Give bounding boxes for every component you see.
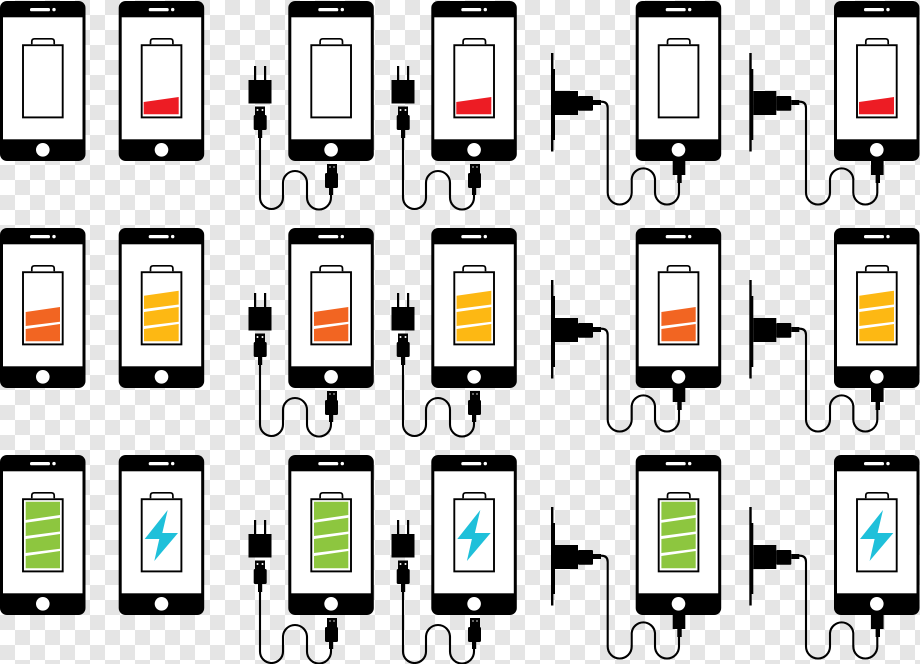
- phone: yellow three-bar battery: [119, 228, 204, 388]
- wall charger and cable: [749, 280, 884, 432]
- phone: low red battery with plug charger: [431, 1, 517, 161]
- phone: empty battery with plug charger: [288, 1, 374, 161]
- wall charger and cable: [551, 507, 685, 658]
- plug charger and cable: [248, 293, 338, 436]
- phone: low red battery: [119, 1, 204, 161]
- wall charger and cable: [749, 53, 884, 205]
- plug charger and cable: [248, 66, 338, 210]
- phone: orange battery on wall charger: [636, 228, 721, 388]
- wall charger and cable: [749, 507, 884, 658]
- phone: charging bolt on wall charger: [834, 455, 920, 615]
- phone: full green battery: [0, 455, 86, 615]
- plug charger and cable: [392, 520, 481, 664]
- phone: empty battery: [0, 1, 86, 161]
- phone: empty battery on wall charger: [636, 1, 721, 161]
- wall charger and cable: [551, 53, 685, 205]
- wall charger and cable: [551, 280, 685, 432]
- phone: charging bolt with plug charger: [431, 455, 517, 615]
- plug charger and cable: [248, 520, 338, 664]
- phone: full green battery on wall charger: [636, 455, 721, 615]
- plug charger and cable: [392, 293, 481, 436]
- plug charger and cable: [392, 66, 481, 210]
- phone: orange two-bar battery: [0, 228, 86, 388]
- phone: orange battery with plug charger: [288, 228, 374, 388]
- phone: yellow battery on wall charger: [834, 228, 920, 388]
- phone: charging bolt battery: [119, 455, 204, 615]
- phone: full green battery with plug charger: [288, 455, 374, 615]
- phone: low red battery on wall charger: [834, 1, 920, 161]
- phone: yellow battery with plug charger: [431, 228, 517, 388]
